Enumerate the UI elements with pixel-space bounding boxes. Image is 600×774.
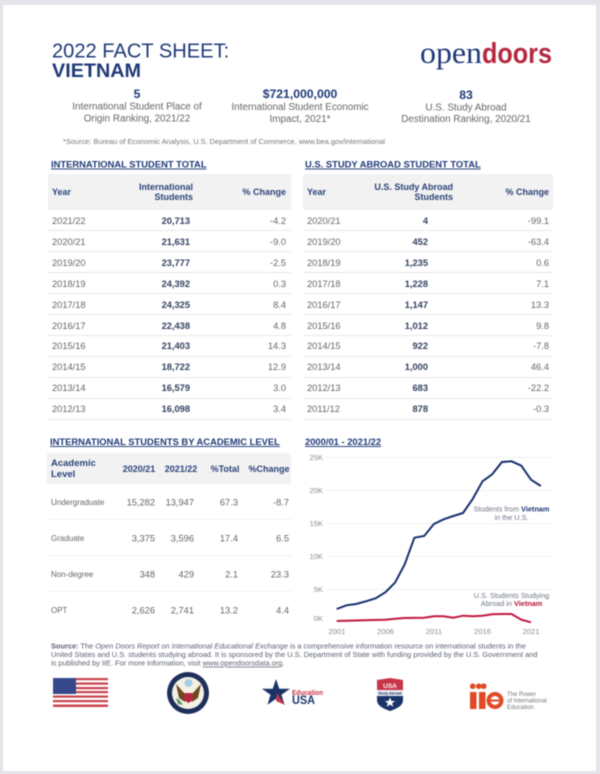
table: study abroad student total: 922 — [412, 341, 428, 351]
table: study abroad student total: U.S. Study Abroad — [374, 182, 453, 192]
label: students from Vietnam: Students from Vietnam — [474, 504, 550, 514]
table: by academic level: 2020/21 — [123, 464, 155, 474]
table: international student total: 2013/14 — [52, 383, 86, 393]
table: international student total: 16,098 — [162, 404, 190, 414]
table: international student total: 2014/15 — [52, 362, 86, 372]
table: by academic level: 2.1 — [225, 570, 238, 580]
table: study abroad student total: 13.3 — [531, 300, 549, 310]
line chart: students 2001-2021: 2021 — [523, 627, 539, 636]
table: study abroad student total: 2015/16 — [307, 321, 341, 331]
line chart: students 2001-2021: 2016 — [474, 627, 491, 636]
table: study abroad student total: 2016/17 — [307, 300, 341, 310]
stat: place of origin ranking: International Student Place of — [72, 102, 202, 112]
table: international student total: Year — [52, 187, 72, 197]
table: by academic level: 429 — [178, 570, 194, 580]
table: international student total: 2018/19 — [52, 279, 86, 289]
table: international student total: 21,403 — [162, 341, 190, 351]
table: by academic level — [47, 453, 291, 616]
logo: opendoors: doors — [482, 38, 552, 70]
logo: IIE: The Power — [507, 692, 536, 698]
table: study abroad student total: Students — [414, 192, 453, 202]
logo: USA Study Abroad: Study Abroad — [378, 692, 402, 696]
table: study abroad student total — [303, 174, 553, 420]
source paragraph: United States and U.S. students studying abroad. It is sponsored by the U.S. Department of State with funding provided by the U.S. Government and — [51, 650, 537, 659]
table: study abroad student total: -7.8 — [533, 341, 549, 351]
table: study abroad student total: -0.3 — [533, 404, 549, 414]
logo: USA Study Abroad: USA — [383, 683, 397, 690]
logo: USA Study Abroad — [377, 678, 403, 711]
table: by academic level: OPT — [51, 606, 68, 615]
logo: EducationUSA: USA — [292, 695, 315, 707]
stat: study abroad ranking: U.S. Study Abroad — [425, 102, 507, 114]
table: by academic level: -8.7 — [273, 498, 289, 508]
table: by academic level: Academic — [51, 458, 96, 469]
heading: study abroad student total: U.S. STUDY ABROAD STUDENT TOTAL — [305, 158, 481, 170]
table: by academic level: 17.4 — [220, 534, 238, 544]
line chart: students 2001-2021 — [309, 453, 552, 636]
table: international student total: 24,392 — [162, 279, 190, 289]
line chart: students 2001-2021: 25K — [309, 453, 323, 462]
table: study abroad student total: 46.4 — [531, 362, 549, 372]
table: international student total — [48, 174, 291, 420]
table: international student total: 22,438 — [162, 321, 190, 331]
table: international student total: 2020/21 — [52, 237, 86, 247]
label: students from Vietnam — [474, 504, 550, 522]
table: by academic level: 2,741 — [171, 606, 194, 616]
line chart: students 2001-2021: 20K — [309, 486, 323, 495]
stat: economic impact: International Student Economic — [231, 102, 369, 113]
label: U.S. students abroad — [474, 591, 549, 608]
table: study abroad student total: 2011/12 — [307, 404, 340, 414]
logo: IIE: Education — [507, 705, 534, 711]
table: by academic level: 3,375 — [132, 534, 155, 544]
table: international student total: 12.9 — [268, 362, 286, 372]
table: international student total: 20,713 — [162, 216, 190, 226]
table: international student total: International — [139, 182, 193, 192]
line chart: students 2001-2021: 15K — [309, 519, 323, 528]
table: international student total: -2.5 — [270, 258, 286, 268]
table: study abroad student total: 1,147 — [405, 300, 428, 310]
line: students from Vietnam in the U.S. — [337, 461, 541, 609]
table: international student total: 21,631 — [162, 237, 190, 247]
line chart: students 2001-2021: 10K — [309, 552, 323, 561]
table: study abroad student total: 2013/14 — [307, 362, 341, 372]
table: by academic level: Level — [51, 469, 75, 480]
title — [52, 40, 229, 82]
table: international student total: Students — [154, 192, 193, 202]
table: study abroad student total: 452 — [412, 237, 428, 247]
table: study abroad student total: 1,000 — [405, 362, 428, 372]
table: international student total: 14.3 — [268, 341, 286, 351]
heading: international student total: INTERNATIONAL STUDENT TOTAL — [51, 158, 207, 170]
table: study abroad student total: Year — [307, 187, 327, 197]
table: study abroad student total: 1,228 — [405, 279, 428, 289]
table: international student total: 3.0 — [273, 383, 286, 393]
table: study abroad student total: 1,235 — [405, 258, 428, 268]
source paragraph: Source: The Open Doors Report on International Educational Exchange is a comprehensive information resource on international students in the — [51, 642, 526, 650]
source note: *Source: Bureau of Economic Analysis, U.S. Department of Commerce, www.bea.gov/international — [63, 137, 385, 146]
label: U.S. students abroad: U.S. Students Studying — [474, 591, 549, 600]
table: international student total: 16,579 — [162, 383, 190, 393]
stat: study abroad ranking: 83 — [459, 88, 473, 102]
table: international student total: 2021/22 — [52, 216, 86, 226]
table: international student total: % Change — [242, 187, 286, 197]
table: study abroad student total: 2020/21 — [307, 216, 341, 226]
table: study abroad student total: -22.2 — [528, 383, 549, 393]
table: international student total: -4.2 — [270, 216, 286, 226]
table: study abroad student total: -99.1 — [528, 216, 549, 226]
table: by academic level: 6.5 — [276, 534, 289, 544]
stat: economic impact — [231, 87, 369, 125]
table: international student total: 3.4 — [273, 404, 286, 414]
table: by academic level: %Total — [211, 464, 239, 474]
source paragraph — [51, 642, 537, 668]
table: study abroad student total: 2018/19 — [307, 258, 341, 268]
heading: by academic level: INTERNATIONAL STUDENTS BY ACADEMIC LEVEL — [50, 436, 280, 447]
table: study abroad student total: 7.1 — [536, 279, 549, 289]
table: study abroad student total: 1,012 — [405, 321, 428, 331]
icon: U.S. flag — [53, 678, 108, 707]
line chart: students 2001-2021: 5K — [314, 585, 323, 594]
table: by academic level: 67.3 — [220, 498, 238, 508]
title: 2022 FACT SHEET: — [52, 40, 229, 62]
table: by academic level: 4.4 — [276, 606, 289, 616]
table: international student total: -9.0 — [270, 237, 286, 247]
stat: study abroad ranking — [401, 88, 531, 125]
table: by academic level: Non-degree — [51, 570, 94, 579]
logo: EducationUSA — [262, 679, 323, 707]
line chart: students 2001-2021: 0K — [314, 614, 323, 623]
label: students from Vietnam: in the U.S. — [494, 513, 529, 522]
table: study abroad student total: 878 — [412, 404, 428, 414]
label: U.S. students abroad: Abroad in Vietnam — [481, 599, 543, 608]
table: international student total: 8.4 — [273, 300, 286, 310]
table: by academic level: Undergraduate — [51, 498, 105, 507]
table: by academic level: 348 — [139, 570, 155, 580]
table: study abroad student total: -63.4 — [528, 237, 549, 247]
logo: opendoors — [420, 35, 552, 70]
table: international student total: 0.3 — [273, 279, 286, 289]
table: by academic level: Graduate — [51, 534, 85, 543]
table: study abroad student total: 2019/20 — [307, 237, 341, 247]
heading: chart period: 2000/01 - 2021/22 — [305, 436, 381, 447]
line chart: students 2001-2021: 2006 — [377, 627, 394, 636]
logo: opendoors: open — [420, 35, 483, 70]
table: study abroad student total: 2017/18 — [307, 279, 341, 289]
table: study abroad student total: 4 — [423, 216, 429, 226]
table: by academic level: 23.3 — [271, 570, 289, 580]
logo: IIE — [470, 684, 547, 711]
table: study abroad student total: 2014/15 — [307, 341, 341, 351]
source paragraph: is published by IIE. For more information, visit www.opendoorsdata.org. — [51, 659, 284, 668]
stat: place of origin ranking: Origin Ranking, 2021/22 — [84, 114, 190, 124]
table: by academic level: 13.2 — [220, 606, 238, 616]
logo: IIE: of International — [507, 698, 547, 704]
stat: economic impact: Impact, 2021* — [270, 114, 331, 125]
table: study abroad student total: 9.8 — [536, 321, 549, 331]
table: international student total: 24,325 — [162, 300, 190, 310]
table: international student total: 2017/18 — [52, 300, 86, 310]
line: U.S. students studying abroad in Vietnam — [337, 614, 531, 622]
stat: place of origin ranking: 5 — [134, 87, 141, 101]
table: international student total: 4.8 — [273, 321, 286, 331]
stat: study abroad ranking: Destination Ranking, 2020/21 — [401, 114, 531, 125]
line chart: students 2001-2021: 2001 — [329, 627, 345, 636]
table: international student total: 18,722 — [162, 362, 190, 372]
table: international student total: 2016/17 — [52, 321, 86, 331]
table: international student total: 2019/20 — [52, 258, 86, 268]
table: international student total: 2015/16 — [52, 341, 86, 351]
table: study abroad student total: 0.6 — [536, 258, 549, 268]
table: international student total: 2012/13 — [52, 404, 86, 414]
table: by academic level: %Change — [248, 464, 290, 474]
table: study abroad student total: % Change — [505, 187, 549, 197]
table: by academic level: 2021/22 — [165, 464, 197, 474]
table: study abroad student total: 2012/13 — [307, 383, 341, 393]
table: study abroad student total: 683 — [412, 383, 428, 393]
table: by academic level: 3,596 — [171, 534, 194, 544]
table: by academic level: 15,282 — [127, 498, 155, 508]
title: VIETNAM — [52, 60, 141, 82]
table: by academic level: 13,947 — [166, 498, 194, 508]
table: by academic level: 2,626 — [132, 606, 155, 616]
table: international student total: 23,777 — [162, 258, 190, 268]
line chart: students 2001-2021: 2011 — [426, 627, 442, 636]
stat: economic impact: $721,000,000 — [263, 87, 337, 101]
logo: EducationUSA: Education — [292, 688, 323, 697]
stat: place of origin ranking — [72, 87, 202, 124]
icon: Department of State seal — [167, 672, 209, 714]
